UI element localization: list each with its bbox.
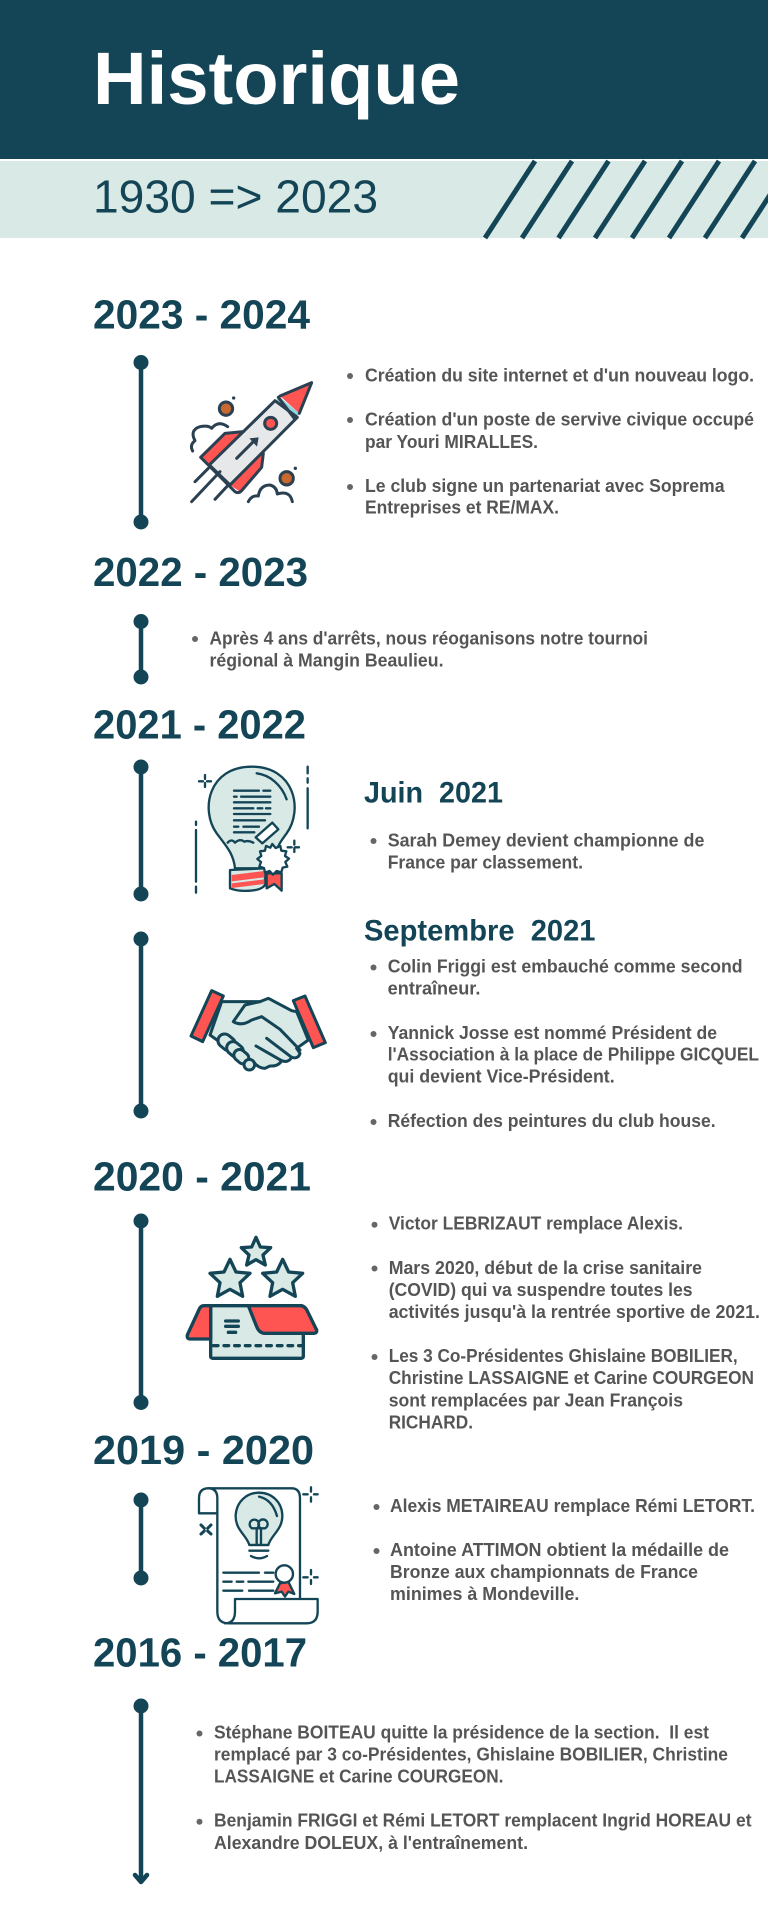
- text: Juin 2021 events: Sarah Demey devient championne de: [388, 830, 704, 850]
- text: Septembre 2021 events: qui devient Vice-Président.: [388, 1066, 615, 1086]
- text: 2023 - 2024 events: Création d'un poste de servive civique occupé: [365, 410, 754, 430]
- text: 2019 - 2020 events: Alexis METAIREAU remplace Rémi LETORT.: [390, 1496, 755, 1516]
- text: 2023 - 2024 events: Le club signe un partenariat avec Soprema: [365, 476, 725, 496]
- text: 2020 - 2021 events: RICHARD.: [389, 1413, 473, 1433]
- text: 2020 - 2021 events: [372, 1214, 760, 1433]
- timeline Juin 2021: [134, 760, 148, 902]
- subtitle: 1930 => 2023: [93, 170, 378, 222]
- text: 2019 - 2020 events: [374, 1496, 755, 1604]
- subtitle band: [0, 161, 768, 238]
- icon: rocket: [191, 383, 312, 502]
- heading 2019 - 2020: 2019 - 2020: [93, 1427, 314, 1473]
- text: 2016 - 2017 events: remplacé par 3 co-Présidentes, Ghislaine BOBILIER, Christine: [214, 1745, 728, 1765]
- text: 2016 - 2017 events: [196, 1723, 752, 1853]
- icon: box with stars: [187, 1237, 317, 1358]
- timeline arrow 2016 - 2017: [134, 1698, 148, 1882]
- section: 2021 - 2022: [93, 702, 759, 1131]
- text: 2016 - 2017 events: Alexandre DOLEUX, à l'entraînement.: [214, 1833, 528, 1853]
- text: 2020 - 2021 events: Christine LASSAIGNE et Carine COURGEON: [389, 1368, 754, 1388]
- heading 2022 - 2023: 2022 - 2023: [93, 549, 308, 595]
- text: Septembre 2021 events: [370, 957, 759, 1131]
- icon: light bulb with certificate: [196, 767, 308, 893]
- section: 2023 - 2024: [93, 292, 754, 530]
- timeline 2022 - 2023: [134, 614, 148, 684]
- icon: diploma scroll with light bulb: [199, 1487, 318, 1623]
- text: Septembre 2021 events: entraîneur.: [388, 978, 480, 998]
- timeline Septembre 2021: [134, 932, 148, 1118]
- text: Septembre 2021 events: Colin Friggi est embauché comme second: [388, 957, 743, 977]
- section: 2022 - 2023: [93, 549, 648, 684]
- section: 2016 - 2017: [93, 1630, 752, 1882]
- heading 2021 - 2022: 2021 - 2022: [93, 702, 306, 748]
- timeline 2023 - 2024: [134, 355, 148, 530]
- text: Septembre 2021 events: l'Association à la place de Philippe GICQUEL: [388, 1045, 759, 1065]
- text: 2016 - 2017 events: LASSAIGNE et Carine COURGEON.: [214, 1766, 503, 1786]
- text: 2022 - 2023 events: Après 4 ans d'arrêts, nous réoganisons notre tournoi: [210, 629, 648, 649]
- text: 2023 - 2024 events: Entreprises et RE/MAX.: [365, 498, 559, 518]
- text: 2019 - 2020 events: Bronze aux championnats de France: [390, 1562, 698, 1582]
- month heading: Septembre 2021: Septembre 2021: [364, 914, 596, 948]
- text: Septembre 2021 events: Réfection des peintures du club house.: [388, 1111, 716, 1131]
- text: 2020 - 2021 events: (COVID) qui va suspendre toutes les: [389, 1280, 693, 1300]
- text: 2020 - 2021 events: Les 3 Co-Présidentes Ghislaine BOBILIER,: [389, 1346, 738, 1366]
- title: Historique: [93, 37, 460, 120]
- header banner: [0, 0, 768, 159]
- text: 2023 - 2024 events: [347, 366, 754, 518]
- text: 2022 - 2023 events: régional à Mangin Beaulieu.: [210, 650, 444, 670]
- icon: handshake: [191, 991, 325, 1070]
- timeline 2019 - 2020: [134, 1492, 148, 1586]
- timeline 2020 - 2021: [134, 1214, 148, 1410]
- text: 2020 - 2021 events: activités jusqu'à la rentrée sportive de 2021.: [389, 1302, 760, 1322]
- heading 2020 - 2021: 2020 - 2021: [93, 1154, 311, 1200]
- text: 2023 - 2024 events: par Youri MIRALLES.: [365, 432, 538, 452]
- heading 2016 - 2017: 2016 - 2017: [93, 1630, 307, 1676]
- text: 2016 - 2017 events: Benjamin FRIGGI et Rémi LETORT remplacent Ingrid HOREAU et: [214, 1811, 752, 1831]
- text: 2019 - 2020 events: minimes à Mondeville.: [390, 1584, 579, 1604]
- month heading: Juin 2021: Juin 2021: [364, 776, 503, 810]
- text: 2020 - 2021 events: Victor LEBRIZAUT remplace Alexis.: [389, 1214, 683, 1234]
- section: 2019 - 2020: [93, 1427, 755, 1623]
- text: 2016 - 2017 events: Stéphane BOITEAU quitte la présidence de la section. Il est: [214, 1723, 709, 1743]
- text: 2020 - 2021 events: sont remplacées par Jean François: [389, 1391, 683, 1411]
- text: Septembre 2021 events: Yannick Josse est nommé Président de: [388, 1023, 717, 1043]
- text: 2023 - 2024 events: Création du site internet et d'un nouveau logo.: [365, 366, 754, 386]
- text: Juin 2021 events: [370, 830, 704, 873]
- heading 2023 - 2024: 2023 - 2024: [93, 292, 310, 338]
- text: 2022 - 2023 events: [192, 629, 648, 670]
- text: 2019 - 2020 events: Antoine ATTIMON obtient la médaille de: [390, 1540, 729, 1560]
- text: Juin 2021 events: France par classement.: [388, 853, 583, 873]
- section: 2020 - 2021: [93, 1154, 760, 1433]
- text: 2020 - 2021 events: Mars 2020, début de la crise sanitaire: [389, 1258, 702, 1278]
